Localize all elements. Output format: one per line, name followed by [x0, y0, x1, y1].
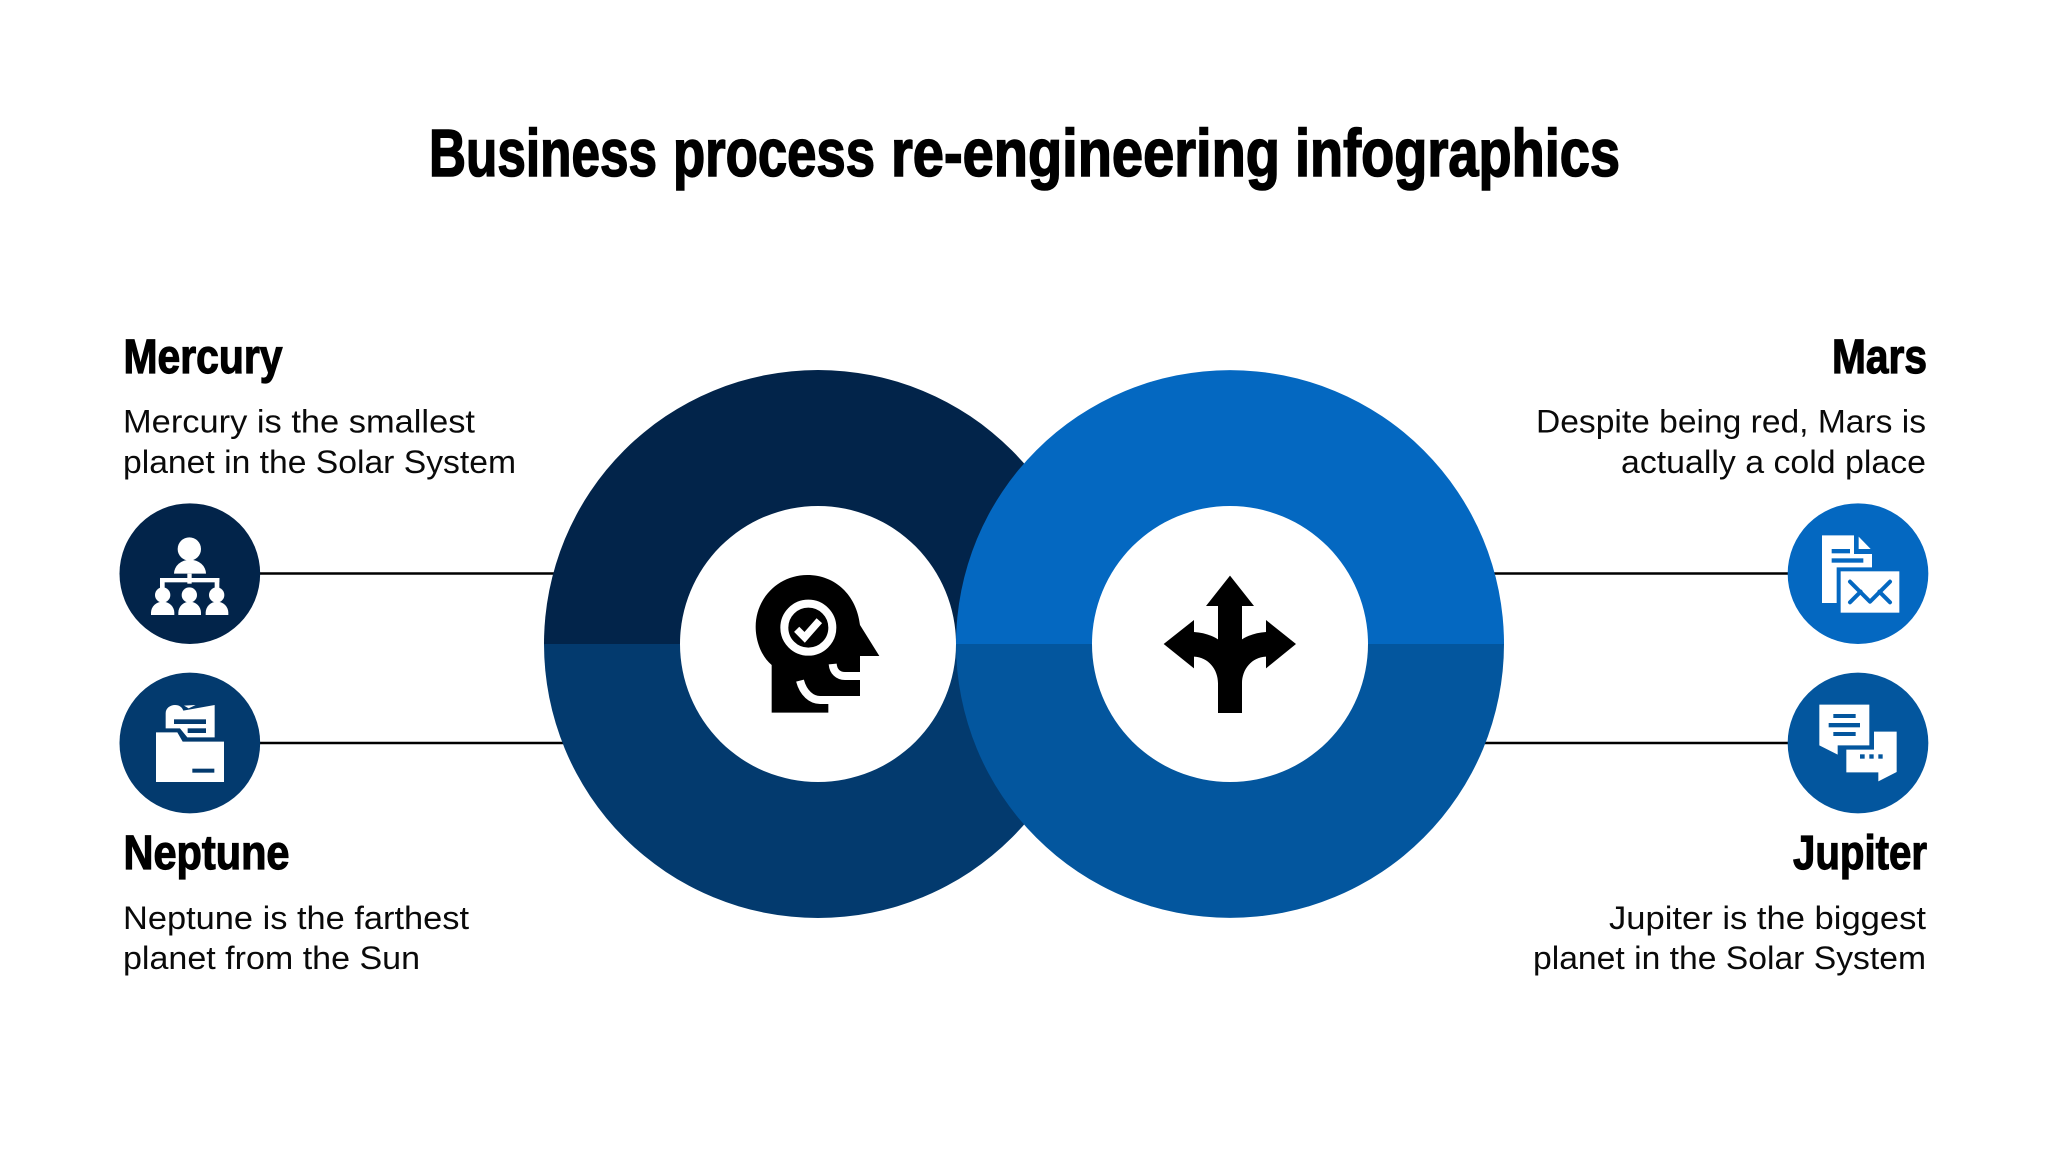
icon: three-way arrows	[1164, 576, 1296, 713]
panel: Mercury	[119, 331, 516, 644]
text: Jupiter description: planet in the Solar System	[1533, 940, 1926, 976]
icon: head with check mark	[756, 575, 879, 713]
icon: document and envelope	[1788, 503, 1928, 644]
heading: Jupiter: Jupiter	[1793, 827, 1927, 880]
left ring	[544, 370, 1092, 918]
panel: Jupiter	[1533, 673, 1928, 976]
panel: Neptune	[119, 673, 469, 976]
text: Mercury description: planet in the Solar System	[123, 444, 516, 480]
text: Neptune description: Neptune is the farthest	[123, 900, 469, 936]
right ring	[956, 370, 1504, 918]
icon: folder with documents	[119, 673, 260, 813]
text: Mars description: Despite being red, Mars is	[1536, 404, 1926, 440]
title: Business	[429, 116, 657, 191]
text: Neptune description: planet from the Sun	[123, 940, 420, 976]
text: Mars description: actually a cold place	[1621, 444, 1926, 480]
title: infographics	[1295, 116, 1620, 191]
heading: Neptune: Neptune	[124, 827, 290, 880]
icon: chat bubbles	[1788, 673, 1928, 813]
text: Mercury description: Mercury is the smallest	[123, 404, 475, 440]
icon: organisation chart	[119, 503, 260, 644]
heading: Mercury: Mercury	[124, 331, 283, 384]
text: Jupiter description: Jupiter is the biggest	[1609, 900, 1926, 936]
title: re-engineering	[891, 116, 1280, 191]
title: process	[673, 116, 875, 191]
connector lines	[260, 574, 1788, 743]
heading: Mars: Mars	[1832, 331, 1927, 384]
panel: Mars	[1536, 331, 1928, 644]
